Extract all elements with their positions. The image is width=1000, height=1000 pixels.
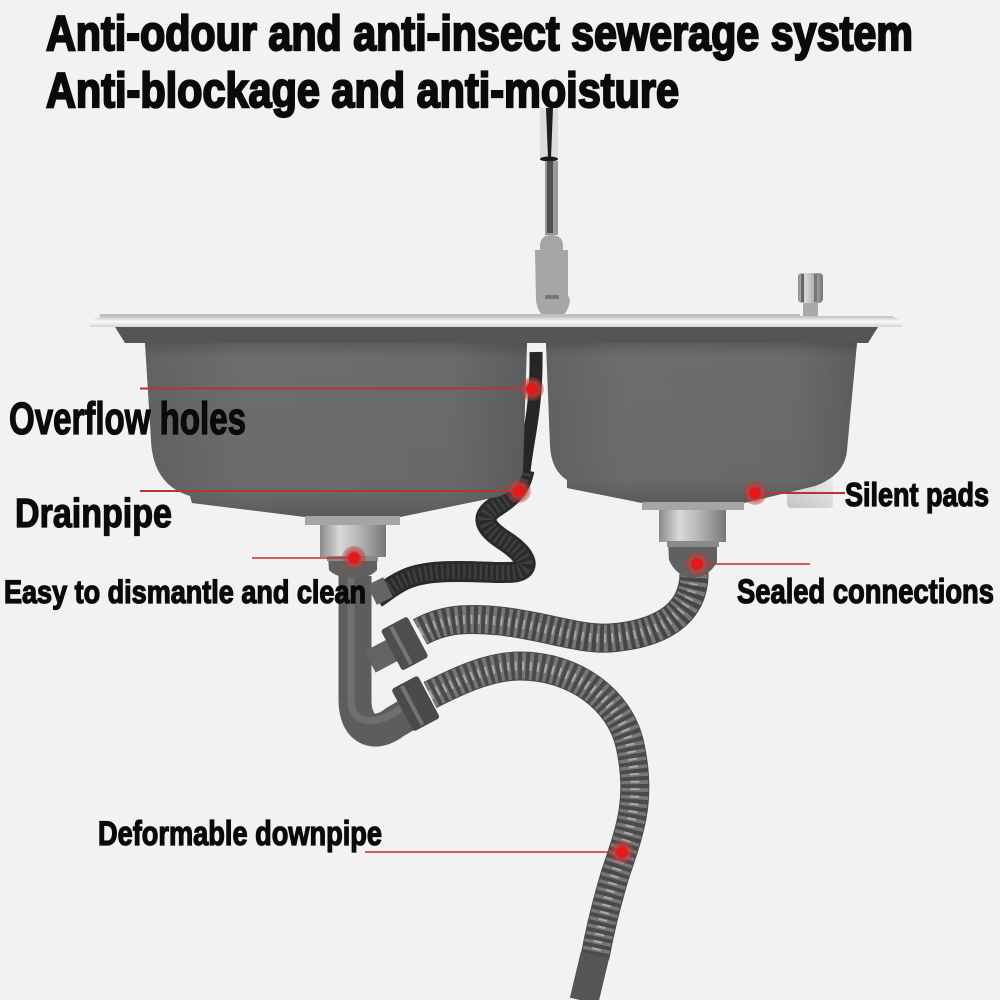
label: drainpipe: Drainpipe [15, 490, 172, 536]
title [46, 7, 913, 118]
right drain strainer [659, 510, 726, 578]
downpipe hose [430, 666, 635, 1000]
label: overflow holes: Overflow holes [9, 393, 246, 444]
silent pad block [787, 478, 833, 508]
sink: flange and rim [90, 314, 902, 343]
callout: sealed connections [685, 552, 810, 576]
callout: drainpipe [140, 479, 531, 503]
callout: overflow holes [140, 377, 544, 401]
overflow hose [376, 352, 536, 598]
faucet [535, 108, 570, 318]
right sink hose [420, 572, 694, 638]
soap dispenser [798, 273, 823, 317]
sink: right bowl [546, 343, 857, 510]
label: easy to dismantle and clean: Easy to dismantle and clean [4, 574, 366, 610]
callout: easy to dismantle [252, 546, 366, 570]
callout: silent pads [743, 481, 845, 505]
title: Anti-blockage and anti-moisture [46, 64, 679, 118]
trap pipe [351, 576, 412, 730]
sink: left bowl [145, 343, 527, 525]
callout: deformable downpipe [365, 840, 634, 864]
left drain strainer [320, 525, 386, 578]
label: deformable downpipe: Deformable downpipe [98, 815, 382, 853]
pipe nuts [381, 616, 440, 732]
